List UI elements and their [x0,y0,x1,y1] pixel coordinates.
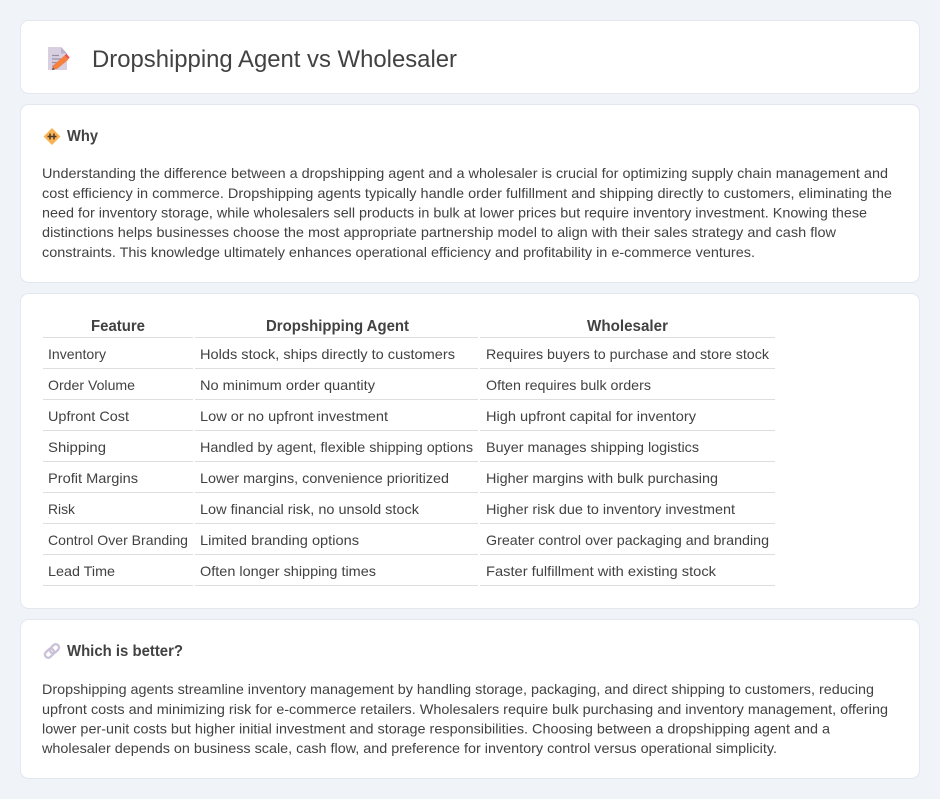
text block: why paragraph: distinctions helps businesses choose the most appropriate partnership model to align with their sales strategy and cash flow [42,224,837,240]
row: inventory: Requires buyers to purchase and store stock [486,346,770,362]
panel: why [20,104,920,282]
row: upfront cost: Upfront Cost [48,408,129,424]
table header: Dropshipping Agent [266,318,409,335]
row: lead time: Often longer shipping times [200,563,376,579]
text block: why paragraph: Understanding the difference between a dropshipping agent and a wholesaler is crucial for optimizing supply chain management and [42,165,888,181]
row: control over branding: Greater control over packaging and branding [486,532,769,548]
row: control over branding: Control Over Branding [48,532,188,548]
row: risk [48,501,735,517]
panel: which is better [20,620,920,778]
row: shipping: Buyer manages shipping logistics [486,439,699,455]
text block: which is better paragraph: lower per-unit costs but higher initial investment and storage responsibilities. Choosing between a dropshipping agent and a [42,720,830,736]
row: lead time: Faster fulfillment with existing stock [486,563,717,579]
table header: Feature [91,318,145,335]
text block: which is better paragraph: wholesaler depends on business scale, cash flow, and preference for inventory control versus operational simplicity. [41,740,777,756]
icon: diamond sign [44,128,60,145]
panel: title header [20,20,920,94]
row: order volume [48,377,651,393]
row: shipping: Shipping [48,439,106,455]
row: upfront cost: Low or no upfront investment [200,408,388,424]
row: upfront cost: High upfront capital for inventory [486,408,696,424]
row: inventory [48,346,770,362]
row: control over branding: Limited branding options [200,532,359,548]
row: inventory: Inventory [48,346,106,362]
text block: why paragraph: need for inventory storage, while wholesalers sell products in bulk at lower prices but require inventory investment. Knowing these [42,204,867,220]
row: shipping: Handled by agent, flexible shipping options [200,439,473,455]
row: order volume: Often requires bulk orders [486,377,651,393]
text block: why paragraph [42,165,892,260]
text block: why paragraph: cost efficiency in commerce. Dropshipping agents typically handle order fulfillment and shipping directly to customers, eliminating the [42,185,892,201]
row: profit margins [48,470,718,486]
heading: which is better: Which is better? [67,643,183,660]
row: order volume: No minimum order quantity [200,377,375,393]
row: shipping [48,439,699,455]
icon: document with pencil [48,47,70,70]
row: risk: Risk [48,501,76,517]
heading: why: Why [67,128,98,145]
text block: which is better paragraph [41,681,888,756]
row: risk: Low financial risk, no unsold stock [200,501,420,517]
icon: link [44,643,60,659]
row: control over branding [48,532,769,548]
row: order volume: Order Volume [48,377,135,393]
row: profit margins: Higher margins with bulk purchasing [486,470,718,486]
row: inventory: Holds stock, ships directly to customers [200,346,455,362]
table header: Wholesaler [587,318,668,335]
row: risk: Higher risk due to inventory investment [486,501,735,517]
row: lead time [48,563,717,579]
row: lead time: Lead Time [48,563,115,579]
panel: comparison table [20,294,920,608]
row: upfront cost [48,408,696,424]
title: Dropshipping Agent vs Wholesaler [92,46,457,73]
row: profit margins: Profit Margins [48,470,138,486]
table header [91,318,668,335]
text block: why paragraph: constraints. This knowledge ultimately enhances operational efficiency and profitability in e-commerce ventures. [42,244,755,260]
text block: which is better paragraph: Dropshipping agents streamline inventory management by handling storage, packaging, and direct shipping to customers, reducing [42,681,874,697]
row: profit margins: Lower margins, convenience prioritized [200,470,449,486]
text block: which is better paragraph: upfront costs and minimizing risk for e-commerce retailers. Wholesalers require bulk purchasing and inventory management, offering [42,701,888,717]
